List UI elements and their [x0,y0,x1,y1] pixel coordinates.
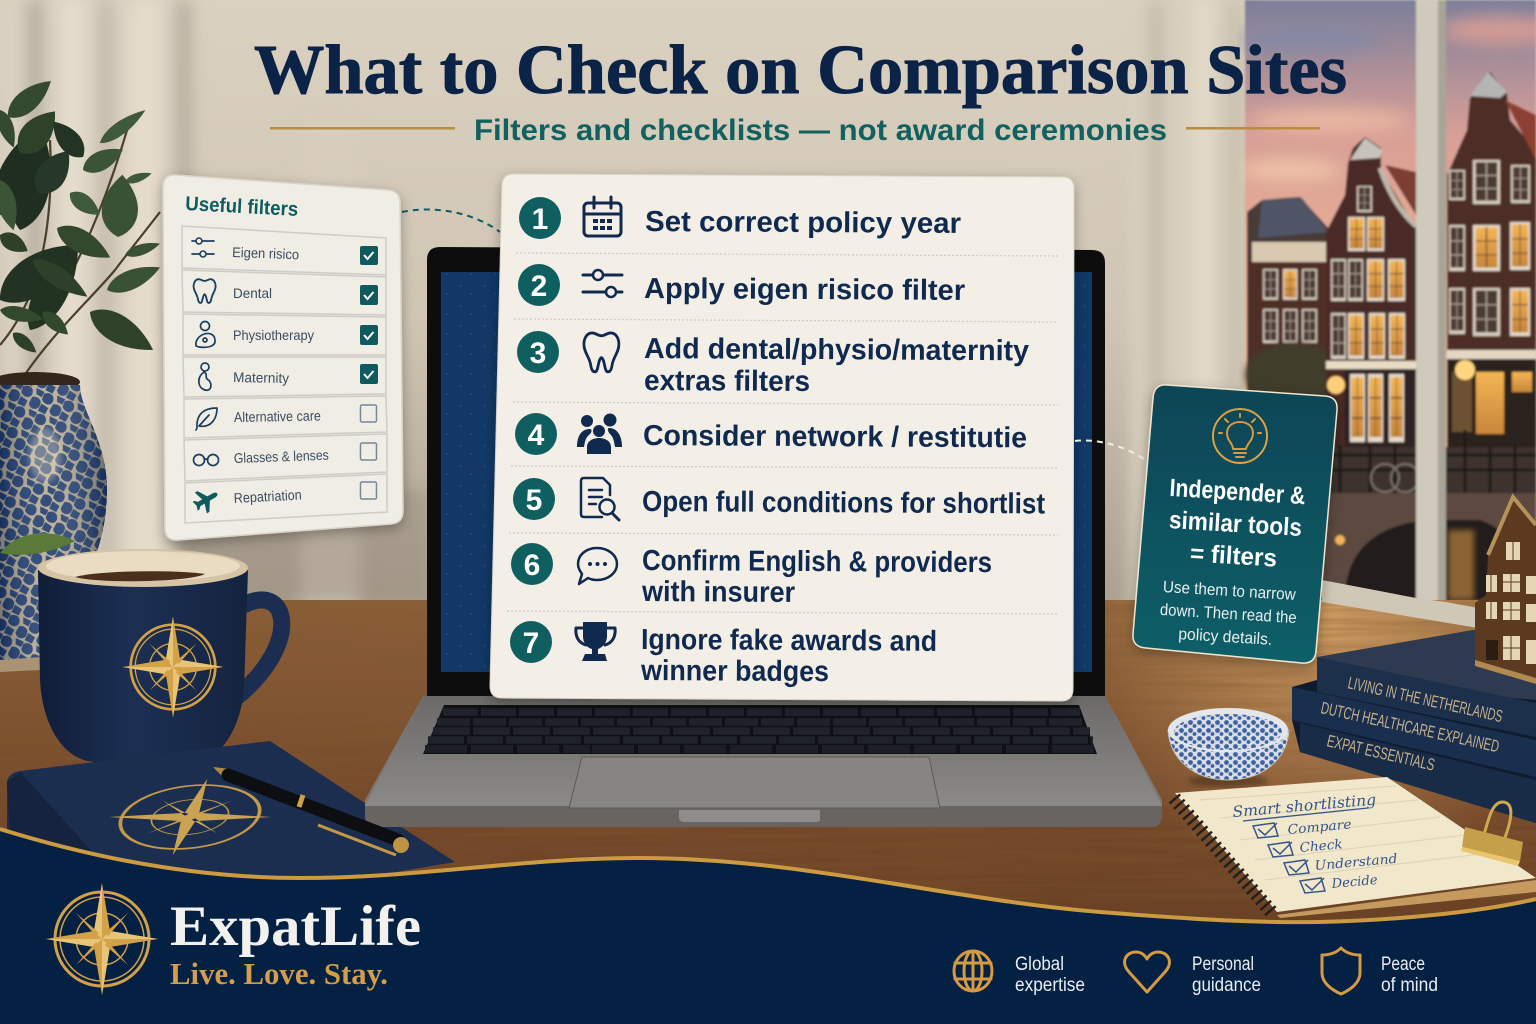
filter row: maternity [199,363,378,390]
book title: expat essentials: EXPAT ESSENTIALS [1325,731,1437,775]
step 4: 4 [528,419,545,452]
step 3 [517,331,1029,398]
step 3: Add dental/physio/maternity [644,333,1029,367]
miniature canal house [1475,497,1536,684]
coffee mug with compass emblem [38,549,282,762]
note items: Understand [1314,852,1398,874]
step 2: 2 [531,270,547,303]
laptop screen [427,247,1105,700]
filter row: alternative care: Alternative care [234,407,321,425]
trust item: peace of mind [1322,948,1438,996]
footer band [0,829,1536,1024]
note items: Decide [1330,873,1378,892]
panel: seven-step checklist [490,174,1074,701]
delft bowl [1168,708,1289,787]
callout body: Use them to narrow [1162,578,1296,604]
filter row: dental: Dental [233,285,272,301]
filter row: glasses and lenses: Glasses & lenses [234,447,329,466]
title: What to Check on Comparison Sites [254,32,1347,109]
building: middle stepped-gable house [1326,137,1420,470]
step 1: 1 [532,203,548,236]
canal with bridge and railing [1245,430,1536,603]
step 4: Consider network / restitutie [643,420,1027,454]
step 1 [519,197,961,240]
filter row: maternity: Maternity [233,369,289,386]
note items: Compare [1287,817,1352,838]
window mullion [1416,0,1446,605]
trust item: personal guidance: guidance [1192,975,1261,996]
plant with leaves [0,73,164,385]
laptop [365,247,1162,827]
logo: expatlife compass and wordmark [46,883,421,995]
step 2 [518,264,965,307]
panel: useful filters [163,175,403,540]
blue and white vase [0,372,107,672]
filter row: physiotherapy: Physiotherapy [233,327,314,343]
building: far left canal house [1245,197,1345,470]
filter row: alternative care [196,405,376,430]
filter row: eigen risico: Eigen risico [232,244,300,262]
window sill [1322,580,1478,628]
step 3: 3 [530,337,546,370]
filter row: physiotherapy [196,322,378,347]
callout body: down. Then read the [1159,601,1297,627]
background: room wall and curtains [0,0,1536,640]
desk surface [0,600,1536,1024]
step 4 [515,413,1027,455]
gold binder clip [1461,802,1523,866]
dashed connector: checklist to tools card [1075,440,1148,462]
note items: Check [1299,837,1343,856]
trust item: peace of mind: Peace [1381,954,1425,975]
step 6: Confirm English & providers [642,545,992,579]
spiral notepad with handwritten list [1174,777,1536,918]
filter row: repatriation [189,482,376,517]
trust item: personal guidance [1125,952,1261,996]
trust item: peace of mind: of mind [1381,975,1438,996]
note title: Smart shortlisting [1232,791,1377,821]
trust item: personal guidance: Personal [1192,954,1254,975]
step 5: 5 [526,484,542,517]
panel: independer callout [1133,385,1337,663]
trust item: global expertise: expertise [1015,975,1085,996]
step 1: Set correct policy year [645,206,961,240]
step 7: 7 [523,627,539,660]
callout heading: Independer & [1169,474,1306,510]
step 7 [510,621,937,688]
window view: Amsterdam canal houses at sunset [1240,0,1536,610]
step 5 [513,478,1045,520]
logo: expatlife compass and wordmark: ExpatLife [170,895,421,958]
note items [1253,817,1398,893]
callout heading: = filters [1189,539,1278,573]
filter row: glasses and lenses [194,443,376,466]
building: right tall gable house [1447,72,1536,470]
stacked books [1292,630,1536,823]
logo: expatlife compass and wordmark: Live. Love. Stay. [170,956,388,991]
laptop base and keyboard [365,696,1162,827]
trust item: global expertise: Global [1015,954,1064,975]
step 2: Apply eigen risico filter [644,273,965,307]
callout heading: similar tools [1168,506,1303,542]
step 7: Ignore fake awards and [641,624,937,658]
icon: lightbulb [1213,409,1267,463]
filter rows grid [182,226,387,523]
filter row: dental [194,279,378,305]
heading: useful filters: Useful filters [185,193,299,221]
trust item: global expertise [954,951,1085,996]
navy notebook with compass [7,741,455,905]
filter row: repatriation: Repatriation [233,486,302,506]
subtitle with gold rules: Filters and checklists — not award ceremonies [474,114,1167,147]
callout heading [1168,474,1306,573]
step 6: 6 [524,549,540,582]
pen [213,767,409,855]
dashed connector: filters card to checklist [402,209,500,232]
step 3: extras filters [644,365,810,398]
callout body [1159,578,1297,649]
callout body: policy details. [1178,625,1273,649]
step 5: Open full conditions for shortlist [642,486,1045,520]
step 6: with insurer [641,576,795,609]
filter row: eigen risico [192,238,378,265]
step 6 [511,543,992,609]
step 7: winner badges [640,655,829,688]
